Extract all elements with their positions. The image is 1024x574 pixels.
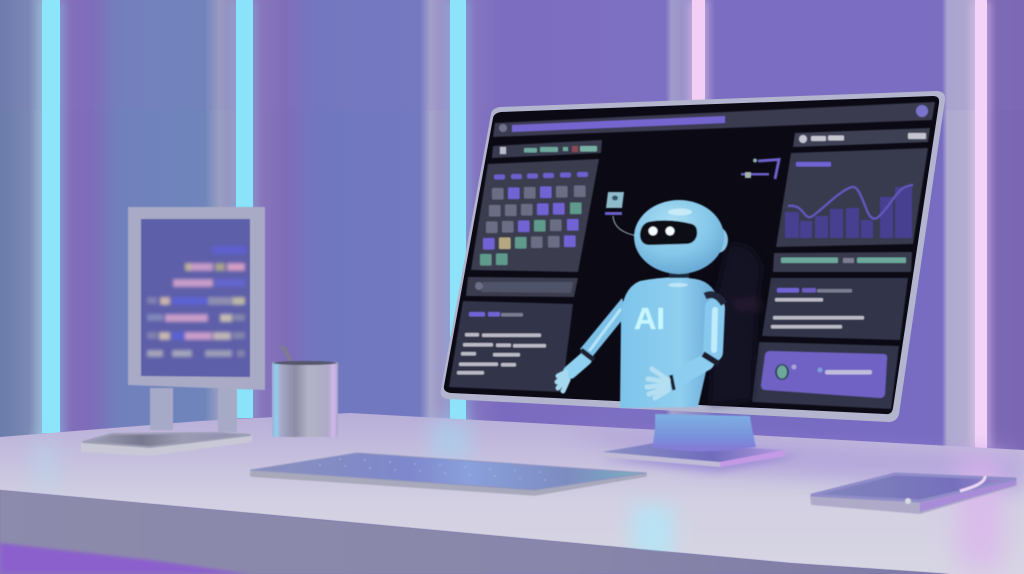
text panel, right xyxy=(762,278,908,340)
desk top xyxy=(0,413,1024,574)
dashboard UI xyxy=(449,102,935,409)
monitor bezel xyxy=(441,91,945,422)
monitor frame xyxy=(128,207,265,390)
neon light strips xyxy=(36,0,991,450)
desk front edge xyxy=(0,490,950,574)
search panel xyxy=(466,277,578,297)
top address bar xyxy=(493,102,935,137)
right arm xyxy=(671,295,724,390)
calendar panel xyxy=(471,159,599,272)
text panel, lower left xyxy=(449,301,573,392)
line and bar chart panel xyxy=(776,148,928,247)
desktop monitor stand xyxy=(600,414,800,472)
left arm xyxy=(570,298,627,372)
small secondary monitor (blurred background) xyxy=(128,207,265,432)
left hand xyxy=(557,372,568,391)
tablet on the desk, right xyxy=(811,474,1016,513)
key rows xyxy=(319,458,546,481)
monitor legs xyxy=(150,388,237,432)
eyes xyxy=(648,226,674,236)
tablet light reflection xyxy=(960,476,985,491)
robot xyxy=(557,200,728,408)
pen xyxy=(282,347,290,363)
phone on the desk, left xyxy=(82,433,251,455)
stand neck xyxy=(652,414,756,452)
connector bracket icon xyxy=(741,158,779,179)
right toolbar xyxy=(793,128,930,147)
stand reflection xyxy=(600,450,800,472)
left toolbar xyxy=(492,140,602,158)
head xyxy=(634,200,724,274)
visor xyxy=(640,220,697,245)
torso xyxy=(620,277,720,408)
right hand xyxy=(647,369,668,398)
keyboard xyxy=(251,453,646,495)
AI chest label: AI xyxy=(634,301,665,336)
ear xyxy=(708,227,728,253)
status row xyxy=(773,252,912,272)
plug icon with cable xyxy=(605,192,638,236)
metal pen cup xyxy=(272,347,338,437)
calendar grid xyxy=(480,186,586,266)
chart bars xyxy=(785,187,912,238)
head highlight xyxy=(668,208,692,216)
torso highlight xyxy=(668,283,688,287)
monitor screen xyxy=(141,219,250,377)
desktop monitor xyxy=(441,91,945,422)
dim chair silhouette behind robot xyxy=(710,244,762,405)
stand base xyxy=(602,443,785,467)
blurred text rows xyxy=(147,246,246,357)
action card panel xyxy=(752,342,899,409)
chart line xyxy=(788,185,913,219)
monitor screen xyxy=(444,96,939,414)
neck xyxy=(669,271,689,278)
calendar header pills xyxy=(494,172,588,180)
